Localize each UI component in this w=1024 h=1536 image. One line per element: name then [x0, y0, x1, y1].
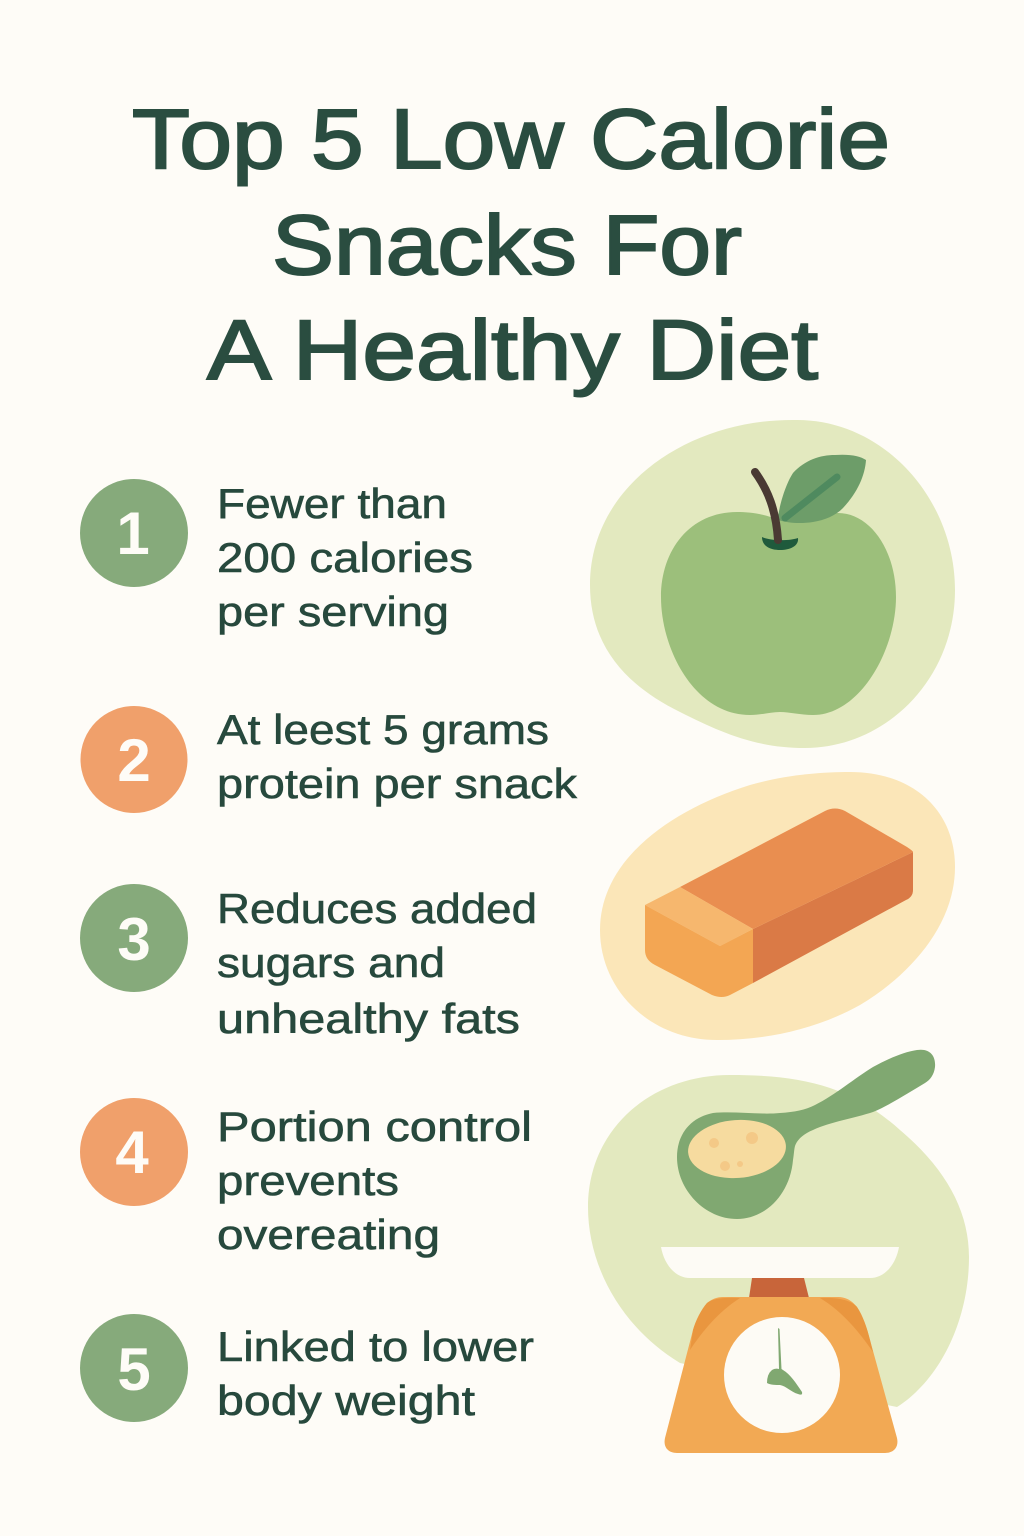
text: fewer than 200 calories: per serving — [217, 588, 449, 635]
number badge 4 — [80, 1098, 188, 1206]
text: lower body weight — [217, 1323, 534, 1424]
list item 1 — [80, 479, 473, 635]
scale shoulders — [690, 1298, 740, 1350]
number badge 3 — [80, 884, 188, 992]
list item 2 — [80, 706, 578, 813]
text: lower body weight: Linked to lower — [217, 1323, 534, 1370]
scale dial — [724, 1317, 840, 1433]
apple background blob — [590, 420, 955, 748]
text: added sugars — [217, 885, 537, 1042]
number badge 4: 4 — [115, 1119, 149, 1186]
text: added sugars: Reduces added — [217, 885, 537, 932]
text: portion control: Portion control — [217, 1103, 532, 1150]
dial needle — [767, 1328, 802, 1395]
text: portion control: prevents — [217, 1157, 399, 1204]
title: Snacks For — [272, 198, 742, 292]
scale neck — [749, 1278, 809, 1298]
apple calyx — [762, 537, 798, 550]
text: portion control — [217, 1103, 532, 1258]
text: fewer than 200 calories — [217, 480, 473, 635]
illustration: spoon and scale — [588, 1050, 969, 1453]
apple leaf — [778, 455, 866, 523]
bar front face — [645, 905, 753, 997]
text: lower body weight: body weight — [217, 1377, 475, 1424]
number badge 3: 3 — [117, 906, 151, 973]
illustration: protein bar — [600, 772, 955, 1040]
apple stem — [755, 472, 778, 540]
number badge 5: 5 — [117, 1336, 151, 1403]
text: protein — [217, 706, 578, 807]
number badge 1: 1 — [116, 500, 150, 567]
text: added sugars: unhealthy fats — [217, 995, 520, 1042]
measuring spoon — [677, 1050, 935, 1219]
text: portion control: overeating — [217, 1211, 440, 1258]
scale body — [665, 1297, 897, 1453]
number badge 2 — [80, 706, 188, 813]
bar end top — [645, 887, 753, 946]
text: fewer than 200 calories: 200 calories — [217, 534, 473, 581]
spoon contents — [686, 1117, 788, 1181]
text: added sugars: sugars and — [217, 939, 445, 986]
list item 5 — [80, 1314, 534, 1424]
text: protein: protein per snack — [217, 760, 578, 807]
title: A Healthy Diet — [207, 303, 818, 397]
apple body — [661, 512, 896, 715]
title — [132, 92, 890, 397]
number badge 5 — [80, 1314, 188, 1422]
text: protein: At leest 5 grams — [217, 706, 549, 753]
bar top face — [680, 808, 913, 929]
list item 4 — [80, 1098, 532, 1258]
bar right side — [753, 852, 913, 983]
title: Top 5 Low Calorie — [132, 92, 890, 186]
bar background blob — [600, 772, 955, 1040]
list item 3 — [80, 884, 537, 1042]
number badge 1 — [80, 479, 188, 587]
illustration: green apple — [590, 420, 955, 748]
text: fewer than 200 calories: Fewer than — [217, 480, 447, 527]
number badge 2: 2 — [117, 727, 151, 794]
scale background blob — [588, 1075, 969, 1407]
scale pan — [661, 1247, 899, 1278]
